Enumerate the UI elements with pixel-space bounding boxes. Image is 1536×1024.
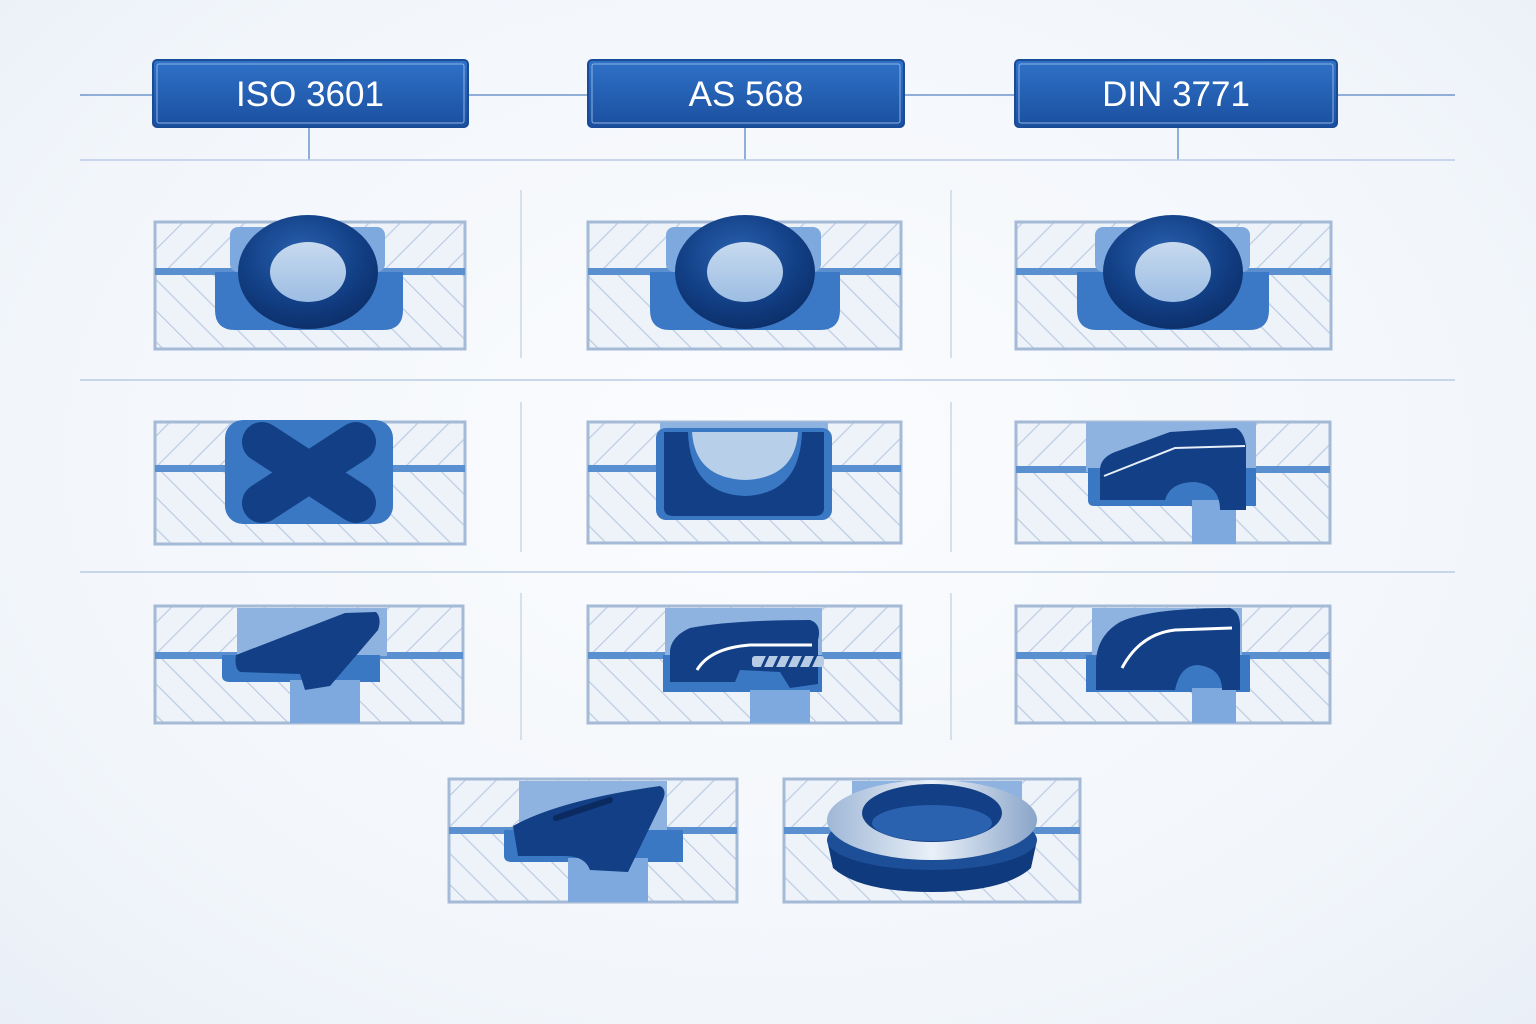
cell: O-ring DIN bbox=[1016, 215, 1331, 349]
cell: wiper seal row 4 bbox=[449, 779, 737, 902]
cell: rod seal with backup AS bbox=[588, 606, 901, 723]
header: DIN 3771: DIN 3771 bbox=[1102, 75, 1250, 114]
header: AS 568: AS 568 bbox=[689, 75, 803, 114]
header: AS 568 bbox=[588, 60, 904, 127]
cell: wedge seal row 3 ISO bbox=[155, 606, 463, 723]
cell: DIN rod seal row 2 bbox=[1016, 422, 1330, 544]
cell: U-cup bbox=[588, 422, 901, 543]
header: ISO 3601 bbox=[153, 60, 468, 127]
cell: flat washer ring bbox=[784, 779, 1080, 902]
header: ISO 3601: ISO 3601 bbox=[236, 75, 384, 114]
header connector lines bbox=[80, 95, 1455, 740]
cell: O-ring AS bbox=[588, 215, 901, 349]
cell: O-ring ISO bbox=[155, 215, 465, 349]
header: DIN 3771 bbox=[1015, 60, 1337, 127]
cell: rod seal DIN row 3 bbox=[1016, 606, 1330, 723]
cell: X-ring bbox=[155, 420, 465, 544]
